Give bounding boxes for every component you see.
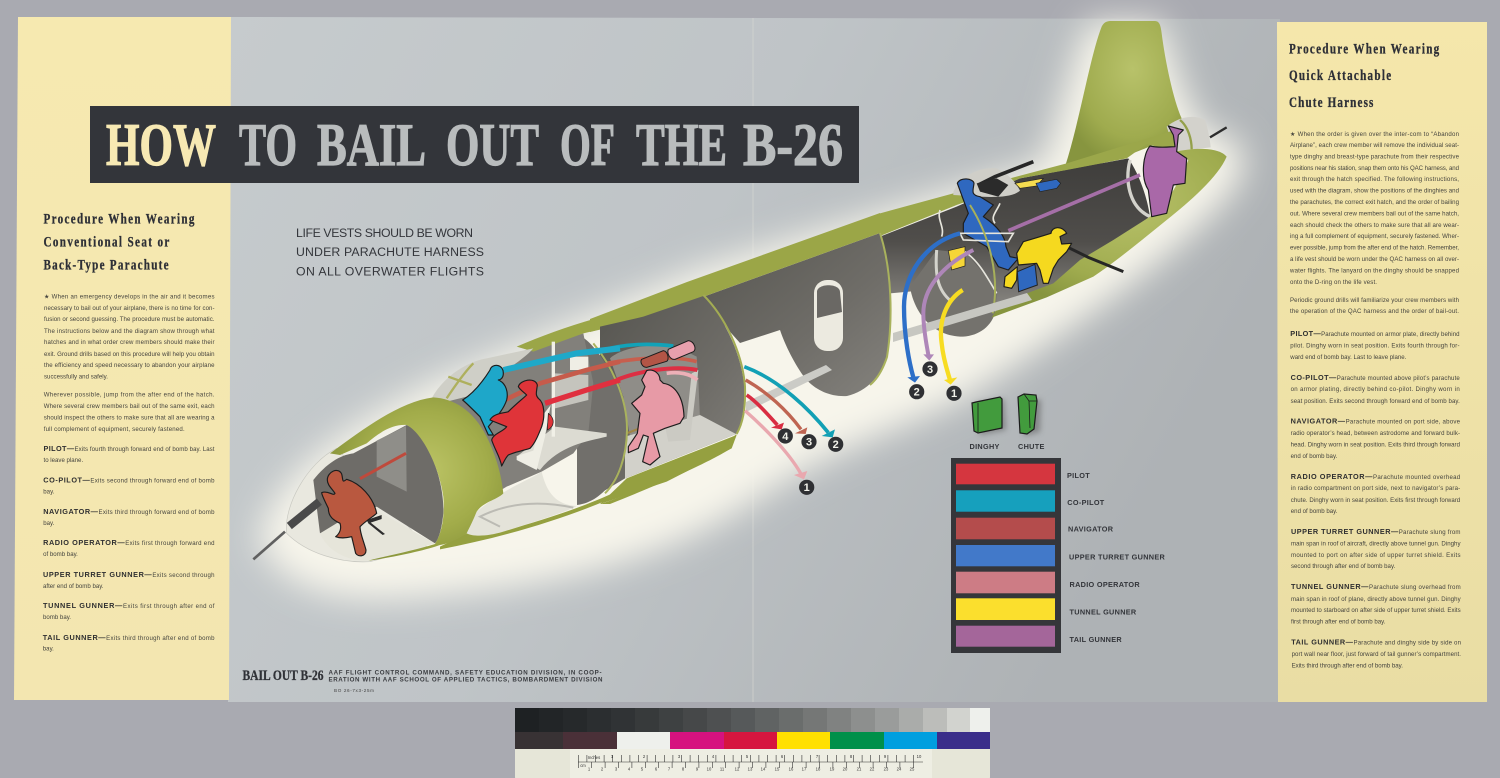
- measuring ruler: 10: [917, 754, 922, 759]
- crew colour legend: CO-PILOT: [1067, 498, 1105, 507]
- compartment floor: [625, 415, 736, 478]
- measuring ruler: 9: [696, 766, 699, 772]
- left panel instructions: the efficiency and speed necessary to abandon your airplane: [44, 362, 215, 369]
- greyscale strip: [515, 708, 990, 732]
- left panel crew exit list: of bomb bay.: [43, 551, 78, 558]
- left panel instructions: [44, 294, 215, 433]
- pilot exit arrow: [747, 395, 777, 425]
- forward arrowheads: [771, 423, 835, 479]
- title banner: OF: [560, 112, 615, 178]
- cockpit glazing: [432, 348, 533, 402]
- left panel crew exit list: TAIL GUNNER—Exits third through after end of bomb: [43, 633, 215, 642]
- measuring ruler: 24: [897, 766, 902, 772]
- tail gunner figure: [1143, 126, 1187, 217]
- left panel crew exit list: bay.: [43, 520, 55, 527]
- left panel instructions: fusion or second guessing. The procedure must be automatic.: [44, 316, 215, 323]
- measuring ruler: 5: [746, 754, 749, 759]
- left panel heading: Back-Type Parachute: [44, 256, 169, 273]
- nose side window: [377, 426, 407, 492]
- left panel crew exit list: RADIO OPERATOR—Exits first through forward end: [43, 538, 214, 547]
- right panel crew equipment list: end of bomb bay.: [1291, 508, 1338, 515]
- crew colour legend: [951, 458, 1166, 653]
- stowed dinghy: [641, 351, 668, 367]
- poster background panel: [228, 17, 1280, 702]
- footer credit: [242, 668, 603, 693]
- crew colour legend: UPPER TURRET GUNNER: [1069, 552, 1166, 562]
- left panel heading: [44, 210, 195, 273]
- lower green hull: [992, 149, 1227, 318]
- right panel crew equipment list: mounted to port on after side of upper turret shield. Exits: [1291, 552, 1460, 559]
- title banner: TO: [239, 112, 297, 178]
- co-pilot exit arrow: [744, 367, 828, 433]
- right panel crew equipment list: TAIL GUNNER—Parachute and dinghy side by side on: [1291, 638, 1461, 646]
- left panel crew exit list: to leave plane.: [44, 457, 83, 464]
- exit order number badges: 1: [804, 482, 810, 494]
- right panel instructions: [1289, 131, 1460, 315]
- lower green hull: [600, 434, 737, 504]
- measuring ruler: 10: [707, 766, 712, 772]
- title banner: BAIL: [317, 112, 426, 178]
- interior crew lines: [600, 344, 697, 433]
- white glow around the airplane: [258, 22, 1244, 599]
- vertical fin: [1065, 21, 1182, 172]
- right panel crew equipment list: chute. Dinghy worn in seat position. Exits first through forward: [1291, 497, 1460, 504]
- measuring ruler: 13: [748, 766, 753, 772]
- measuring ruler: 6: [781, 754, 784, 759]
- upper turret gunner exit arrow: [904, 233, 960, 377]
- navigator stool: [367, 515, 385, 535]
- measuring ruler: 14: [761, 766, 766, 772]
- life vest notice: UNDER PARACHUTE HARNESS: [296, 245, 484, 259]
- wing spars: [746, 293, 1032, 412]
- rear fuselage and tail: [880, 21, 1227, 337]
- measuring ruler: 16: [789, 766, 794, 772]
- left panel crew exit list: UPPER TURRET GUNNER—Exits second through: [43, 570, 214, 579]
- measuring ruler: 4: [628, 766, 631, 772]
- tunnel gunner figure: [1017, 228, 1072, 283]
- tail gunner exit line: [1008, 175, 1140, 231]
- compartment interior: [600, 296, 744, 493]
- upper green fuselage skin: [880, 130, 1175, 236]
- right panel crew equipment list: UPPER TURRET GUNNER—Parachute slung from: [1291, 527, 1460, 536]
- measuring ruler: 23: [884, 766, 889, 772]
- nose interior wall: [313, 425, 443, 543]
- right panel crew equipment list: pilot. Dinghy worn in seat position. Exits fourth through for-: [1290, 342, 1460, 350]
- rear interior: [880, 158, 1150, 310]
- left panel instructions: full complement of equipment, securely fastened.: [44, 426, 185, 433]
- right panel crew equipment list: second through after end of bomb bay.: [1291, 563, 1396, 570]
- measuring ruler: Inches: [588, 755, 600, 760]
- measuring ruler: 7: [816, 754, 819, 759]
- footer credit: BAIL OUT B-26: [242, 668, 324, 684]
- radio operator exit arrow: [745, 411, 801, 473]
- colour strip: [515, 732, 990, 749]
- radio operator figure: [628, 370, 684, 465]
- green nose collar: [330, 397, 503, 561]
- right panel instructions: onto the D-ring on the life vest.: [1290, 279, 1377, 286]
- right panel crew equipment list: first through after end of bomb bay.: [1291, 618, 1386, 626]
- lower bomb bay floor: [467, 472, 577, 536]
- left panel crew exit list: PILOT—Exits fourth through forward end of bomb bay. Last: [44, 444, 215, 453]
- airplane cutaway diagram: [253, 21, 1227, 562]
- measuring ruler: 4: [712, 754, 715, 759]
- stowed parachute: [668, 341, 695, 359]
- right panel instructions: Periodic ground drills will familiarize your crew members with: [1290, 297, 1459, 304]
- yellow parachute pack: [948, 247, 965, 270]
- life vest notice: [296, 226, 484, 278]
- right panel instructions: the operation of the QAC harness and the order of bail-out.: [1290, 308, 1459, 315]
- measuring ruler: 8: [850, 754, 853, 759]
- right panel crew equipment list: CO-PILOT—Parachute mounted above pilot’s parachute: [1291, 373, 1460, 382]
- co-pilot figure: [463, 365, 507, 435]
- tail compartment rim: [1128, 160, 1150, 217]
- crew colour legend: TUNNEL GUNNER: [1070, 608, 1137, 616]
- left panel instructions: ★ When an emergency develops in the air and it becomes: [44, 294, 214, 300]
- left panel instructions: Wherever possible, jump from the after end of the hatch.: [44, 392, 215, 398]
- left yellow panel: conventional parachute procedure: [14, 17, 231, 700]
- right panel instructions: ★ When the order is given over the inter-com to “Abandon: [1290, 131, 1459, 138]
- measuring ruler: 21: [857, 766, 862, 772]
- right panel instructions: used with the diagram, show the positions of the dinghies and: [1290, 188, 1459, 194]
- yellow dinghy on fuselage: [1015, 178, 1043, 188]
- left panel heading: Conventional Seat or: [44, 233, 169, 250]
- right yellow panel: quick attachable harness procedure: [1277, 22, 1487, 702]
- compartment back wall: [610, 346, 700, 437]
- icon: dinghy: [972, 397, 1006, 435]
- compartment green rim: [703, 295, 745, 434]
- tunnel gunner exit arrow: [941, 290, 963, 380]
- center bulkhead: [700, 233, 891, 396]
- upper mid fuselage skin: [590, 213, 880, 332]
- title banner: HOW: [106, 112, 216, 178]
- right panel crew equipment list: PILOT—Parachute mounted on armor plate, directly behind: [1290, 329, 1460, 338]
- right panel instructions: out. Where several crew members bail out of the same hatch,: [1290, 210, 1459, 218]
- right panel instructions: type dinghy and breast-type parachute from their respective: [1290, 154, 1460, 160]
- measuring ruler: 2: [643, 754, 646, 759]
- blue dinghy on fuselage: [1036, 179, 1061, 192]
- right panel crew equipment list: NAVIGATOR—Parachute mounted on port side, above: [1291, 416, 1461, 426]
- measuring ruler: 15: [775, 766, 780, 772]
- right panel instructions: each should check the others to make sure that all are wear-: [1290, 222, 1459, 229]
- left panel instructions: successfully and safely.: [44, 374, 108, 380]
- right panel crew equipment list: TUNNEL GUNNER—Parachute slung overhead from: [1291, 582, 1461, 591]
- forward exit arrows: [744, 367, 828, 473]
- left panel instructions: hatches and in what order crew members should make their: [44, 339, 214, 346]
- left panel crew exit list: [43, 444, 215, 652]
- left panel instructions: necessary to bail out of your airplane, there is no time for con-: [44, 305, 214, 312]
- measuring ruler: 3: [678, 754, 681, 759]
- exit order number badges: 3: [927, 364, 933, 376]
- life vest notice: ON ALL OVERWATER FLIGHTS: [296, 264, 484, 278]
- crew colour legend: NAVIGATOR: [1068, 524, 1114, 534]
- crew colour legend: RADIO OPERATOR: [1070, 580, 1140, 589]
- measuring ruler: 12: [735, 766, 740, 772]
- nose and cockpit section: [253, 319, 630, 562]
- right panel instructions: water flights. The lanyard on the dinghy should be snapped: [1289, 268, 1459, 274]
- left panel instructions: exit. Ground drills based on this procedure will help you obtain: [44, 351, 214, 358]
- life vest notice: LIFE VESTS SHOULD BE WORN: [296, 226, 473, 240]
- measuring ruler: 1: [611, 754, 614, 759]
- tail gunner exit arrow: [923, 250, 973, 357]
- pilot seat: [517, 405, 551, 470]
- footer credit: BO 26-7x3-25m: [334, 688, 374, 693]
- crew colour legend: TAIL GUNNER: [1070, 635, 1122, 644]
- right panel crew equipment list: head. Dinghy worn in seat position. Exits third through forward: [1291, 442, 1460, 448]
- left panel crew exit list: NAVIGATOR—Exits third through forward end of bomb: [43, 507, 215, 516]
- tail gun turret: [1167, 117, 1227, 152]
- right panel crew equipment list: [1289, 329, 1462, 670]
- title banner: OUT: [446, 112, 539, 178]
- measuring ruler: 8: [682, 766, 685, 772]
- title banner: THE: [636, 112, 727, 178]
- pilot figure: [490, 380, 544, 466]
- measuring ruler: 5: [641, 766, 644, 772]
- left panel instructions: should inspect the others to make sure that all are wearing a: [44, 414, 215, 422]
- left panel crew exit list: bay.: [43, 488, 55, 496]
- measuring ruler: 25: [910, 766, 915, 772]
- upper turret: [953, 162, 1033, 197]
- upper cockpit skin: [517, 319, 595, 352]
- tunnel gun: [1067, 247, 1123, 272]
- left panel instructions: Where several crew members bail out of the same exit, each: [44, 403, 215, 410]
- title banner: B-26: [743, 112, 843, 178]
- navigator exit arrow: [746, 380, 801, 429]
- lower fuselage strip: [440, 480, 630, 549]
- right panel crew equipment list: seat position. Exits second through forward end of bomb bay.: [1291, 398, 1460, 405]
- mid fuselage compartment: [577, 295, 835, 505]
- right panel instructions: a life vest should be worn under the QAC harness on all over-: [1290, 256, 1459, 263]
- measuring ruler: cm: [580, 763, 586, 768]
- forward bulkhead ring: [577, 337, 627, 505]
- exit order number badges: [778, 361, 962, 495]
- right panel crew equipment list: Exits third through after end of bomb bay.: [1292, 662, 1403, 670]
- cockpit interior: [437, 333, 593, 507]
- right panel crew equipment list: radio operator’s head, between astrodome and forward bulk-: [1291, 430, 1460, 437]
- left panel heading: Procedure When Wearing: [44, 210, 195, 227]
- right panel crew equipment list: in radio compartment on port side, next to navigator’s para-: [1291, 485, 1460, 492]
- left panel instructions: The instructions below and the diagram show through what: [44, 328, 215, 335]
- bulkhead window: [814, 280, 843, 351]
- exit order number badges: 3: [806, 437, 812, 449]
- measuring ruler: 20: [843, 766, 848, 772]
- right panel instructions: ever possible, jump from the after end of the hatch. Remember,: [1290, 244, 1459, 252]
- right panel instructions: ing a full complement of equipment, securely fastened. Wher-: [1290, 233, 1459, 240]
- right panel instructions: Airplane”, each crew member will remove the individual seat-: [1290, 142, 1459, 149]
- right panel crew equipment list: on armor plating, directly behind co-pilot. Dinghy worn in: [1291, 386, 1460, 393]
- right panel instructions: the parachutes, the correct exit hatch, and the order of bailing: [1290, 199, 1459, 206]
- measuring ruler: 6: [655, 766, 658, 772]
- icon: chute: [1018, 394, 1041, 436]
- blue dinghy beside tunnel gunner: [1017, 264, 1037, 292]
- right panel instructions: exit through the hatch specified. The following instructions,: [1290, 176, 1459, 183]
- dinghy label: DINGHY: [970, 442, 1000, 451]
- footer credit: AAF FLIGHT CONTROL COMMAND, SAFETY EDUCATION DIVISION, IN COOP-: [328, 670, 602, 676]
- right panel heading: [1289, 40, 1440, 110]
- measuring ruler: 9: [884, 754, 887, 759]
- measuring ruler: 18: [816, 766, 821, 772]
- measuring ruler: 7: [668, 766, 671, 772]
- nose machine gun: [253, 502, 319, 559]
- left panel crew exit list: bay.: [43, 646, 54, 652]
- bulkhead rim and ragged skin edges: [939, 203, 1013, 293]
- nose floor: [320, 505, 435, 561]
- measuring ruler: 3: [615, 766, 618, 772]
- equipment key: dinghy and chute: [970, 394, 1045, 451]
- navigator line: [360, 453, 406, 479]
- right panel heading: Procedure When Wearing: [1289, 40, 1440, 57]
- title banner: [90, 106, 859, 183]
- cockpit bulkhead light panels: [517, 342, 607, 470]
- rear exit arrows: [904, 233, 973, 380]
- radio operator seat: [665, 370, 698, 442]
- measuring ruler: 1: [588, 766, 591, 772]
- lower rear bulkhead: [910, 250, 997, 337]
- measuring ruler: 2: [601, 766, 604, 772]
- measuring ruler: 17: [802, 766, 807, 772]
- footer credit: ERATION WITH AAF SCHOOL OF APPLIED TACTICS, BOMBARDMENT DIVISION: [328, 676, 603, 684]
- right panel heading: Chute Harness: [1289, 93, 1373, 110]
- exit order number badges: 2: [914, 387, 920, 399]
- right panel crew equipment list: main span in roof of aircraft, directly above tunnel gun. Dinghy: [1291, 540, 1461, 548]
- measuring ruler: 19: [830, 766, 835, 772]
- crew colour legend: PILOT: [1067, 471, 1090, 480]
- right panel crew equipment list: mounted to starboard on after side of upper turret shield. Exits: [1291, 607, 1461, 614]
- rear arrowheads: [907, 354, 957, 385]
- cockpit crew lines: [477, 348, 620, 413]
- nose glass: [286, 448, 427, 562]
- right panel crew equipment list: port wall near floor, just forward of tail gunner’s compartment.: [1292, 651, 1461, 658]
- right panel instructions: positions near his station, snap them onto his QAC harness, and: [1290, 165, 1459, 172]
- right panel crew equipment list: RADIO OPERATOR—Parachute mounted overhead: [1291, 472, 1460, 481]
- measuring ruler: 11: [720, 766, 725, 772]
- measuring ruler: 22: [870, 766, 875, 772]
- chute label: CHUTE: [1018, 442, 1045, 451]
- left panel crew exit list: bomb bay.: [43, 614, 71, 621]
- exit order number badges: 4: [782, 431, 789, 443]
- left panel crew exit list: CO-PILOT—Exits second through forward end of bomb: [43, 476, 215, 484]
- exit order number badges: 2: [833, 439, 839, 451]
- right panel crew equipment list: main span in roof of plane, directly above tunnel gun. Dinghy: [1291, 596, 1462, 603]
- exit order number badges: 1: [951, 388, 957, 400]
- right panel crew equipment list: ward end of bomb bay. Last to leave plane.: [1289, 354, 1407, 361]
- right panel heading: Quick Attachable: [1289, 66, 1391, 83]
- right panel crew equipment list: end of bomb bay.: [1291, 453, 1338, 460]
- left panel crew exit list: TUNNEL GUNNER—Exits first through after end of: [43, 601, 215, 610]
- measuring ruler: [570, 749, 932, 778]
- colour calibration card: [515, 708, 990, 778]
- left panel crew exit list: after end of bomb bay.: [43, 583, 104, 590]
- upper turret gunner figure: [957, 179, 1018, 270]
- navigator figure: [322, 470, 377, 556]
